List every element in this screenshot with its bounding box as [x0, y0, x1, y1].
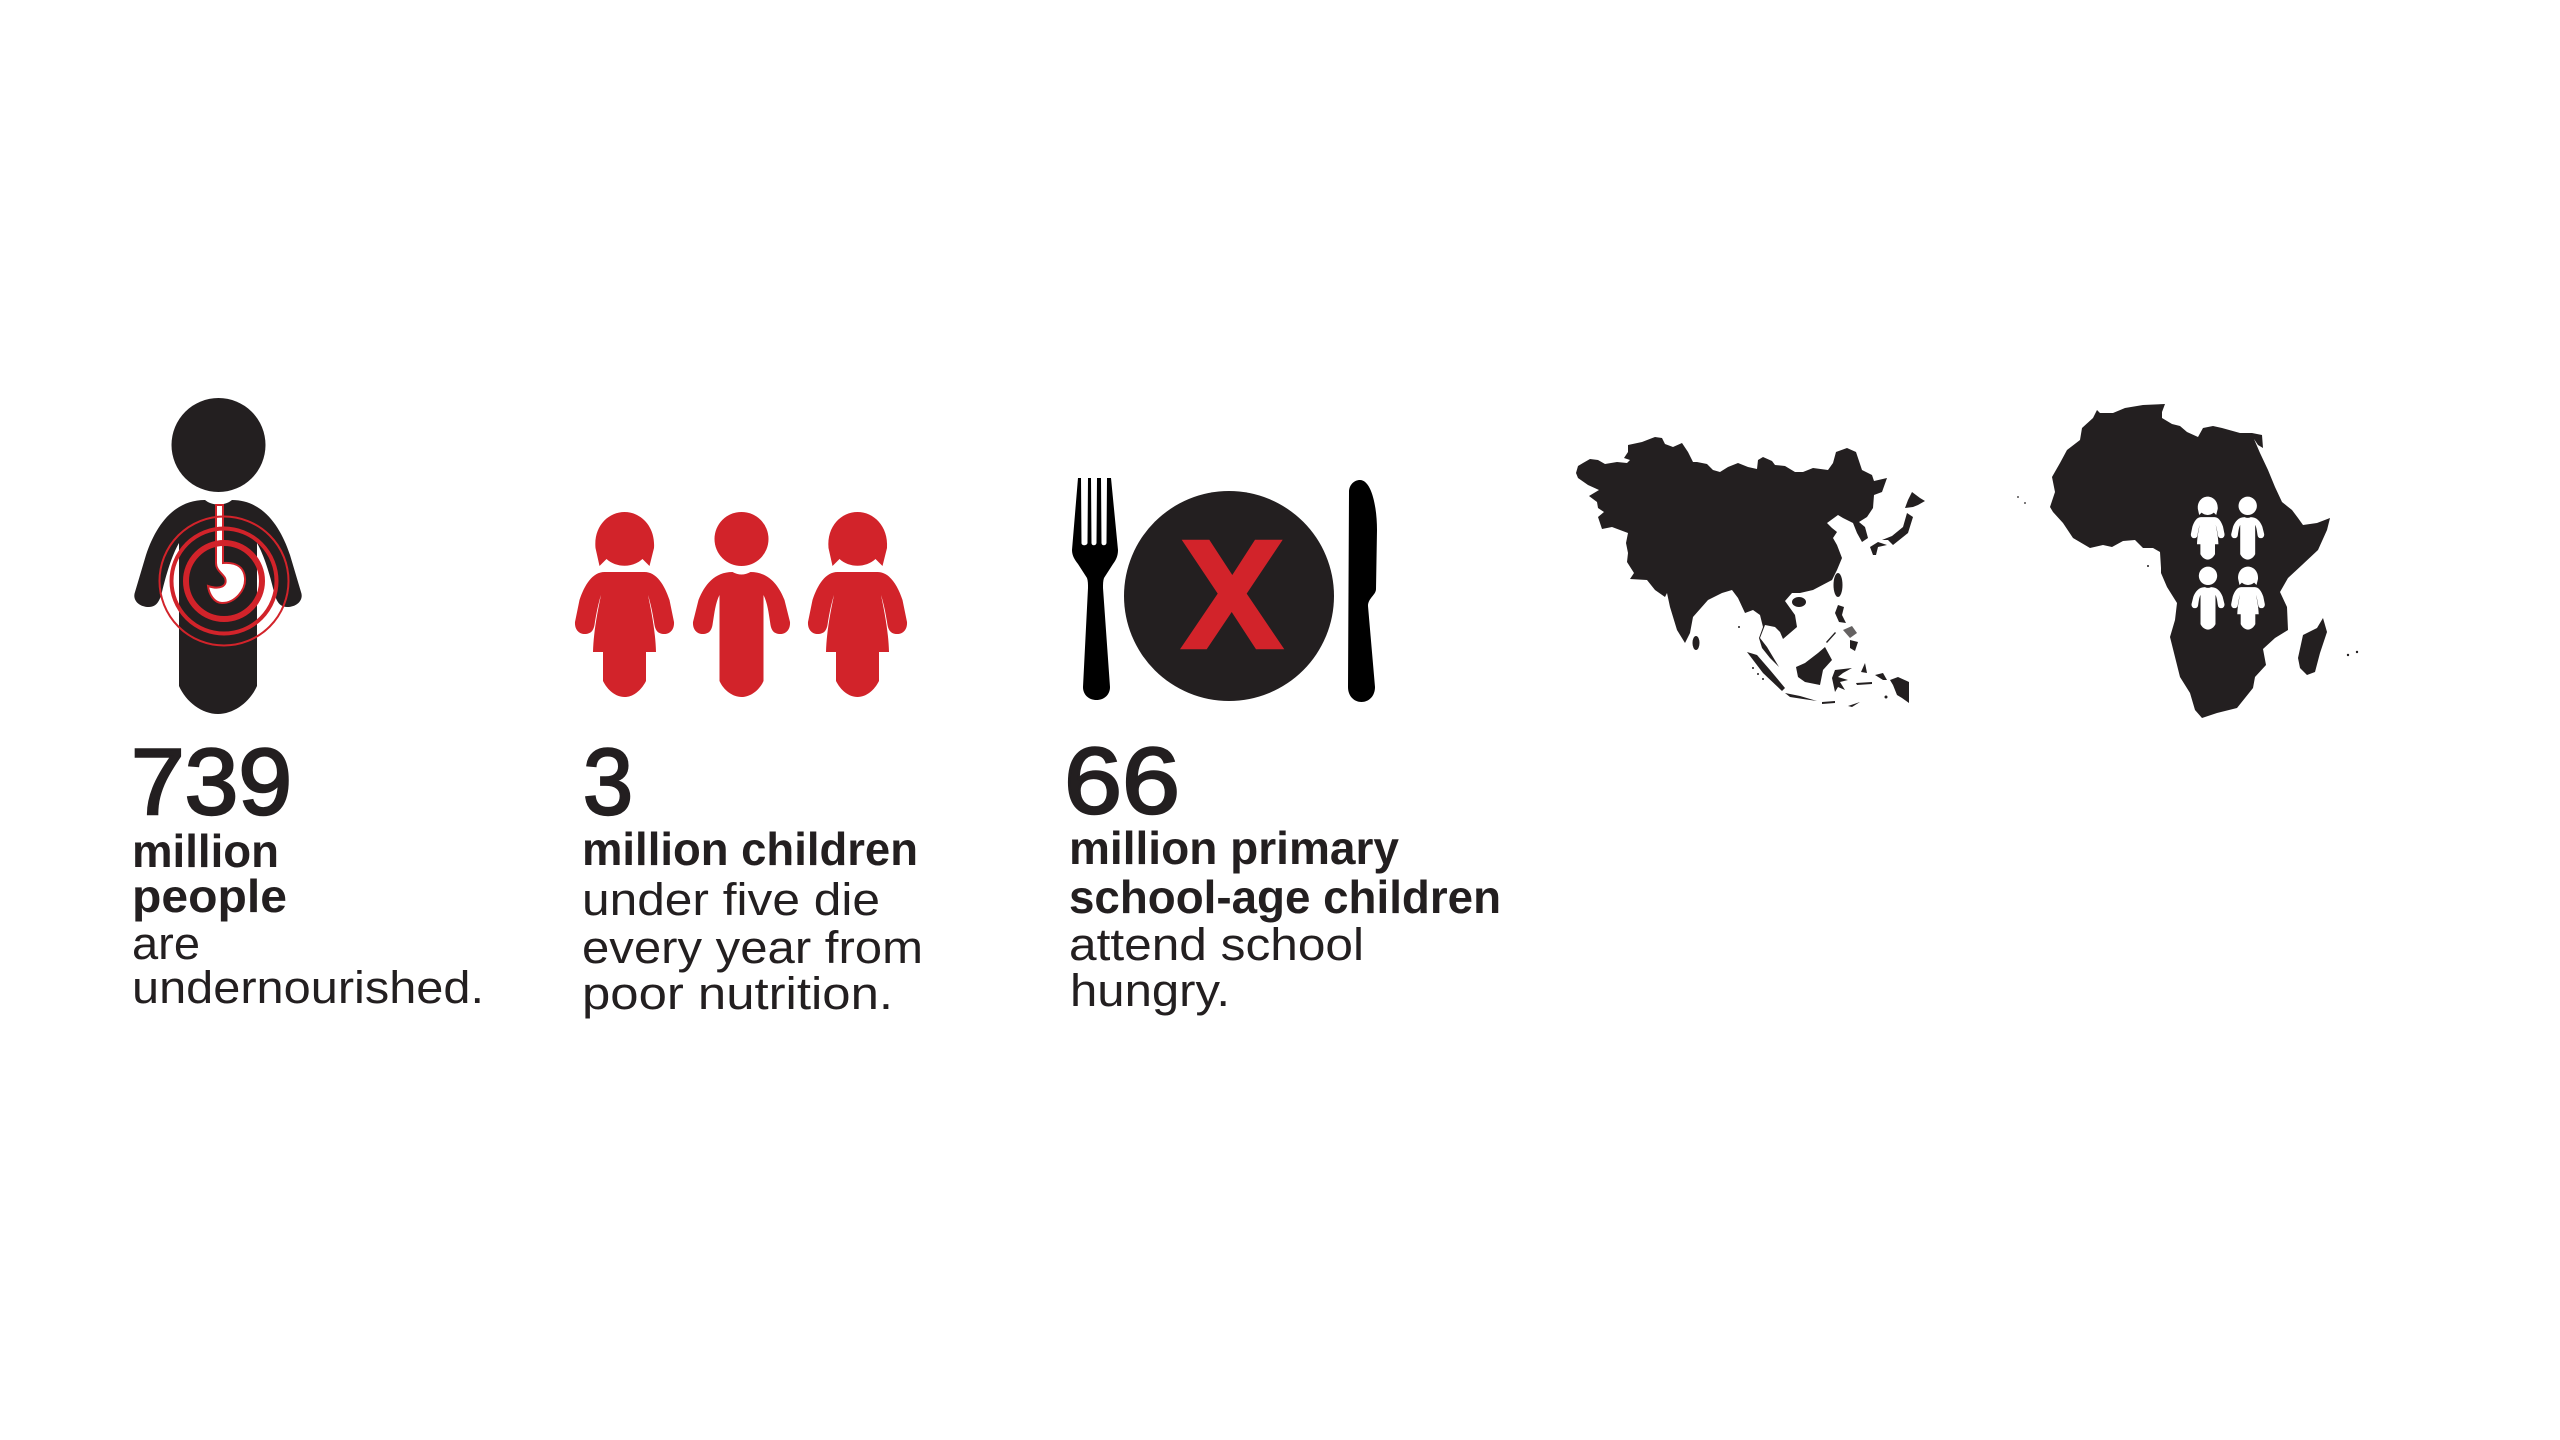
- icon: plate with fork and knife: [1072, 478, 1377, 702]
- text block: million children under five: under five die: [582, 874, 880, 925]
- text block: million primary school-age children: hungry.: [1070, 965, 1230, 1016]
- map: Africa with children: [2017, 404, 2358, 718]
- pain rings: [160, 516, 288, 646]
- map: Asia: [1576, 437, 1925, 707]
- fork: [1072, 478, 1118, 700]
- red X: [1180, 540, 1284, 649]
- person body: [134, 500, 302, 714]
- panel: hungry school children: [1064, 478, 1501, 1016]
- text block: million primary school-age children: school-age children: [1069, 871, 1501, 923]
- child: boy: [693, 512, 790, 697]
- text block: million primary school-age children: million primary: [1069, 822, 1399, 874]
- panel: children dying: [575, 512, 923, 1019]
- text block: million primary school-age children: attend school: [1069, 919, 1364, 970]
- stat number: 3: 3: [583, 729, 633, 834]
- white children on Africa: [2191, 497, 2265, 630]
- icon: person with stomach: [134, 398, 302, 714]
- Asia mainland: [1576, 437, 1887, 667]
- text block: million children under five: [582, 823, 923, 1019]
- knife: [1348, 480, 1377, 702]
- child: girl right: [808, 512, 907, 697]
- text block: million people are undernourished: people: [132, 870, 287, 922]
- icon: three children: [575, 512, 907, 697]
- stat number: 66: 66: [1064, 728, 1180, 833]
- text block: million people are undernourished: [132, 825, 484, 1013]
- stat number: 739: 739: [131, 729, 292, 834]
- text block: million children under five: poor nutrition.: [582, 968, 893, 1019]
- panel: undernourished people: [131, 398, 484, 1013]
- child: boy top right: [2231, 497, 2264, 560]
- text block: million people are undernourished: are: [132, 918, 200, 969]
- person head: [172, 398, 266, 492]
- text block: million people are undernourished: million: [132, 825, 279, 877]
- child: girl bottom right: [2231, 567, 2265, 630]
- child: girl left: [575, 512, 674, 697]
- child: girl top left: [2191, 497, 2225, 560]
- text block: million children under five: million children: [582, 823, 918, 875]
- text block: million children under five: every year from: [582, 922, 923, 973]
- Africa continent: [2017, 404, 2358, 718]
- text block: million primary school-age children: [1069, 822, 1501, 1016]
- stomach: [208, 505, 245, 603]
- Asia islands: [1692, 492, 1925, 707]
- text block: million people are undernourished: undernourished.: [132, 962, 484, 1013]
- child: boy bottom left: [2191, 567, 2225, 630]
- plate: [1124, 491, 1334, 701]
